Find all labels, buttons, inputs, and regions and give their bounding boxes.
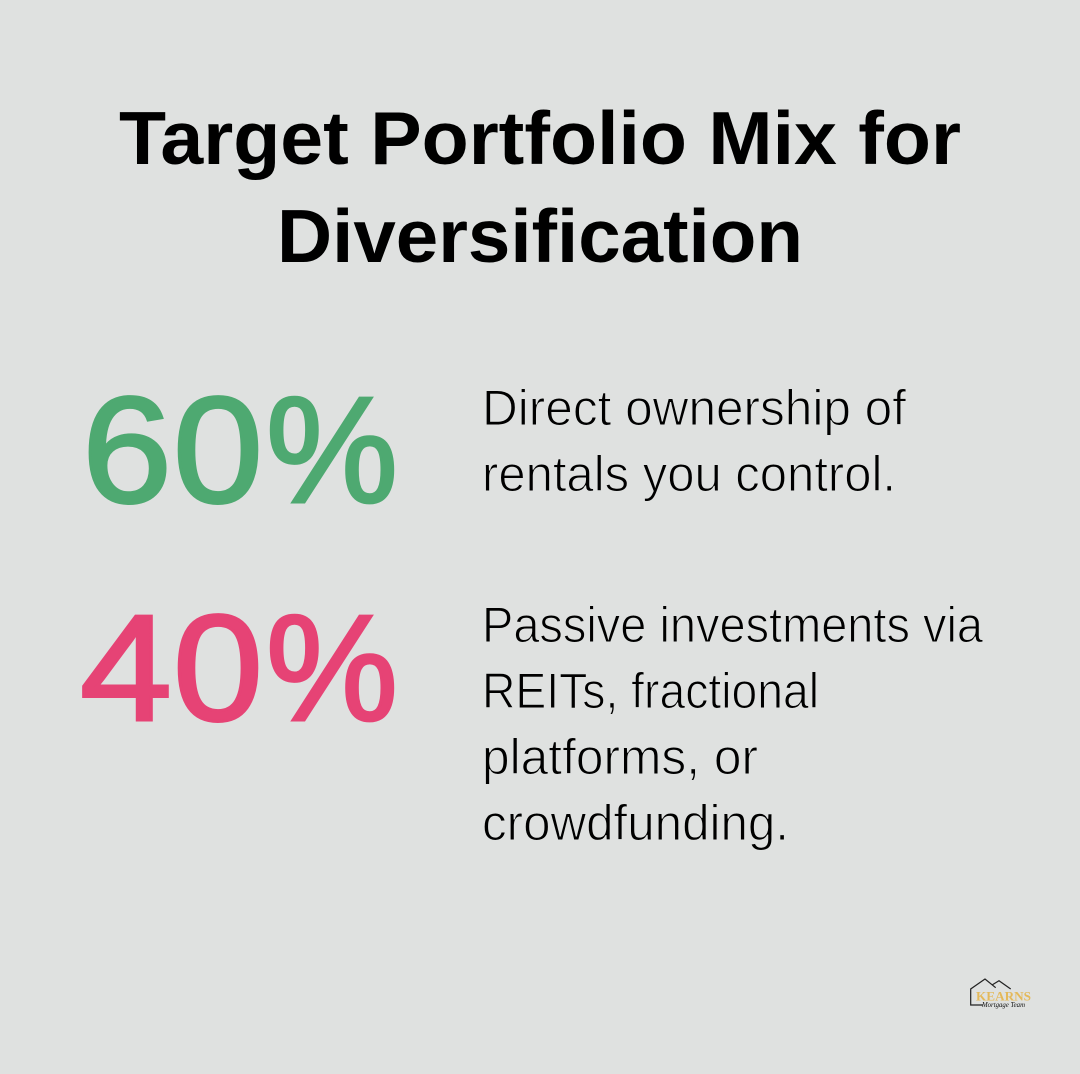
description: direct ownership: Direct ownership of <box>482 380 906 436</box>
value: 40%: 4 <box>80 583 172 752</box>
value: 40% <box>80 583 398 752</box>
title: Diversification <box>277 194 803 278</box>
logo: Kearns Mortgage Team <box>971 979 1031 1009</box>
description: direct ownership <box>482 380 906 502</box>
description: direct ownership: rentals you control. <box>482 446 896 502</box>
description: passive investments: platforms, or <box>482 729 758 785</box>
title <box>119 96 961 278</box>
stat: 40 percent passive investments <box>80 583 983 851</box>
logo tagline: Mortgage Team <box>981 1000 1026 1009</box>
description: passive investments: Passive investments via <box>482 597 983 653</box>
icon: house outline <box>971 979 1011 1005</box>
description: passive investments: REITs, fractional <box>482 663 819 719</box>
value: 40%: % <box>266 583 398 752</box>
value: 60%: 6 <box>82 365 172 534</box>
stat: 60 percent direct ownership <box>82 365 906 534</box>
value: 60%: 0 <box>173 365 263 534</box>
logo wordmark: KEARNS <box>976 989 1031 1003</box>
title: Target Portfolio Mix for <box>119 96 961 180</box>
description: passive investments <box>482 597 983 851</box>
value: 40%: 0 <box>173 583 263 752</box>
description: passive investments: crowdfunding. <box>482 795 789 851</box>
value: 60% <box>82 365 398 534</box>
value: 60%: % <box>266 365 398 534</box>
